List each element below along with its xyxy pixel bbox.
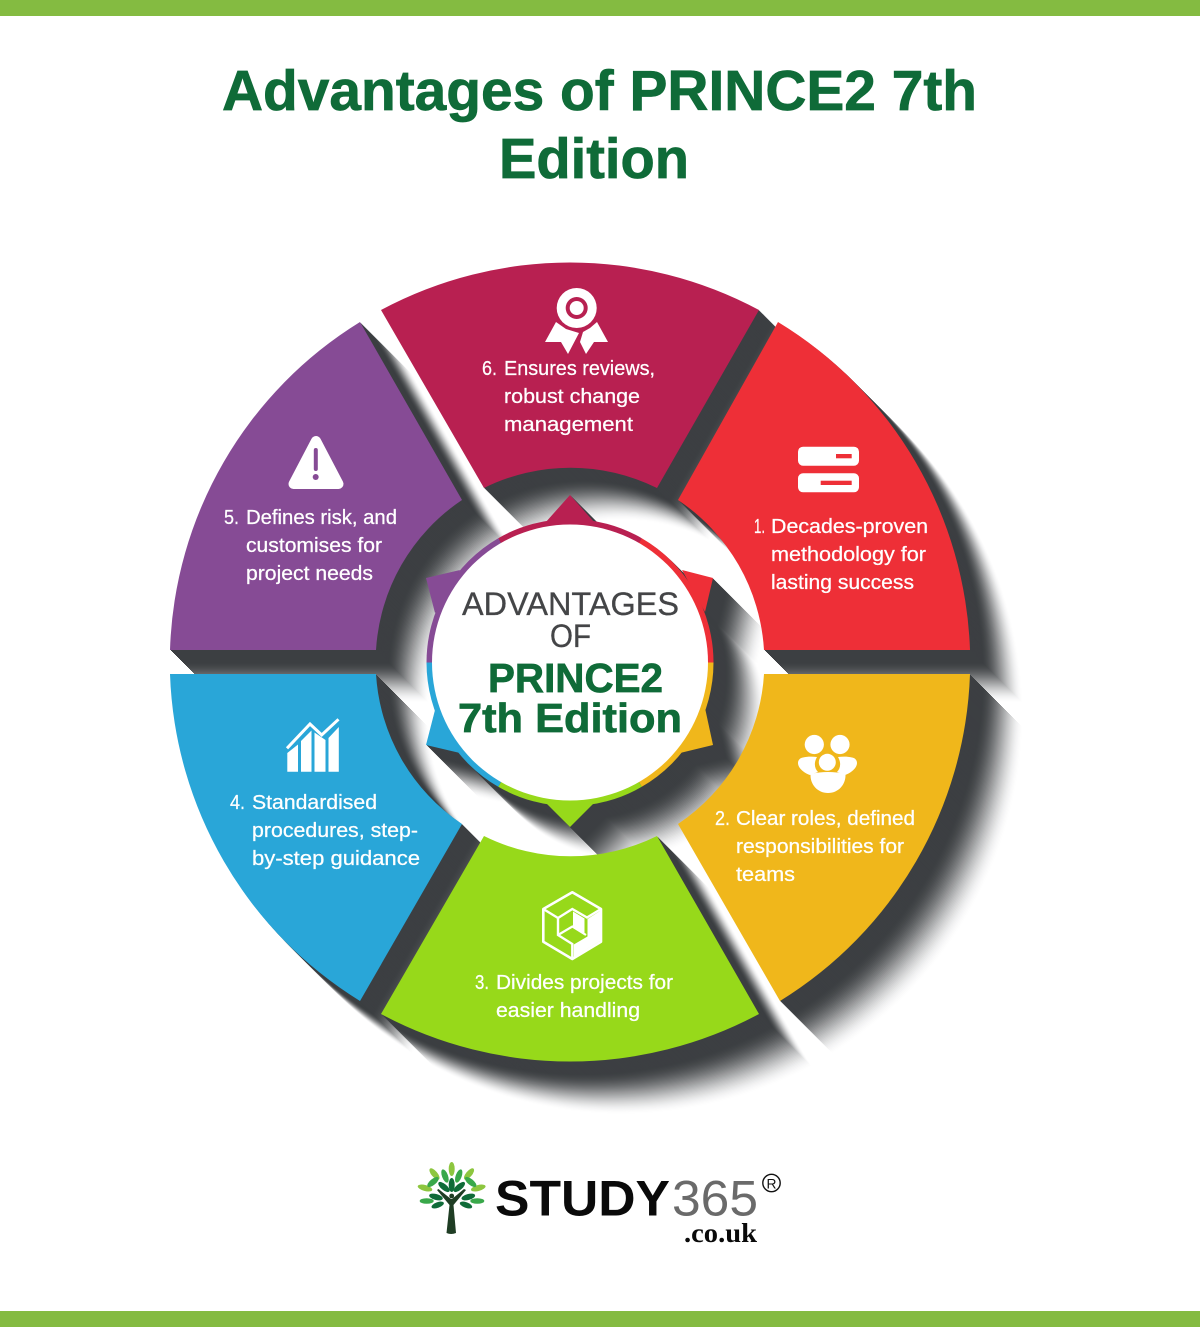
title	[222, 59, 977, 191]
ring sector yellow	[570, 662, 714, 787]
ring sector purple	[426, 538, 570, 662]
text: advantage 4: by-step guidance	[252, 848, 420, 870]
text: advantage 2: teams	[736, 864, 795, 886]
text: advantage 4	[230, 792, 420, 870]
text: advantage 1: methodology for	[771, 544, 926, 566]
center text: PRINCE2	[488, 655, 663, 701]
panel: segment 3 green	[381, 836, 759, 1061]
text: advantage 2	[715, 808, 915, 886]
icon: cube	[543, 892, 601, 959]
panel: segment 5 purple	[170, 322, 462, 650]
ring sector maroon	[498, 495, 642, 662]
text: advantage 5: Defines risk, and	[246, 507, 397, 529]
logo wordmark: STUDY	[495, 1171, 670, 1227]
icon: warning triangle	[294, 441, 338, 484]
text: advantage 5	[224, 507, 397, 585]
center text	[458, 586, 682, 741]
text: advantage 6	[482, 358, 655, 436]
text: advantage 2: responsibilities for	[736, 836, 904, 858]
text: advantage 4: Standardised	[252, 792, 377, 814]
center disc	[432, 524, 708, 800]
text: advantage 2: 2.	[715, 808, 730, 830]
text: advantage 6: 6.	[482, 358, 497, 380]
center text: 7th Edition	[458, 695, 682, 741]
title: Advantages of PRINCE2 7th	[222, 59, 977, 123]
logo: Study365	[417, 1162, 780, 1248]
text: advantage 5: project needs	[246, 563, 373, 585]
text: advantage 1: Decades-proven	[771, 516, 928, 538]
icon: server stack	[798, 447, 859, 492]
ring sector red	[570, 538, 714, 662]
text: advantage 2: Clear roles, defined	[736, 808, 915, 830]
panel: segment 2 yellow	[678, 674, 970, 1001]
center text: OF	[550, 618, 591, 654]
text: advantage 3: easier handling	[496, 1000, 640, 1022]
text: advantage 1	[754, 516, 928, 594]
icon: rising bar chart	[287, 719, 339, 772]
logo wordmark: R	[766, 1176, 776, 1192]
icon: team	[798, 735, 857, 793]
center badge	[426, 495, 714, 827]
text: advantage 5: customises for	[246, 535, 382, 557]
text: advantage 4: 4.	[230, 792, 245, 814]
icon: tree	[417, 1162, 486, 1234]
ring sector blue	[426, 662, 570, 787]
text: advantage 6: robust change	[504, 386, 640, 408]
panel: segment 1 red	[678, 322, 970, 650]
title: Edition	[499, 127, 689, 191]
panel: segment 4 blue	[170, 674, 462, 1001]
icon: award ribbon	[545, 288, 608, 354]
text: advantage 5: 5.	[224, 507, 239, 529]
text: advantage 1: 1.	[754, 516, 765, 538]
text: advantage 1: lasting success	[771, 572, 914, 594]
text: advantage 3: 3.	[475, 972, 489, 994]
text: advantage 6: management	[504, 414, 633, 436]
text: advantage 3: Divides projects for	[496, 972, 673, 994]
long drop shadow of the wheel	[171, 264, 1022, 1113]
center text: ADVANTAGES	[462, 586, 679, 622]
ring sector green	[498, 662, 642, 827]
text: advantage 6: Ensures reviews,	[504, 358, 655, 380]
logo wordmark: .co.uk	[684, 1218, 757, 1248]
text: advantage 3	[475, 972, 673, 1022]
text: advantage 4: procedures, step-	[252, 820, 418, 842]
top bar	[0, 0, 1200, 16]
logo wordmark: 365	[672, 1171, 758, 1227]
bottom bar	[0, 1311, 1200, 1327]
logo wordmark	[495, 1171, 780, 1248]
panel: segment 6 maroon	[381, 263, 759, 488]
